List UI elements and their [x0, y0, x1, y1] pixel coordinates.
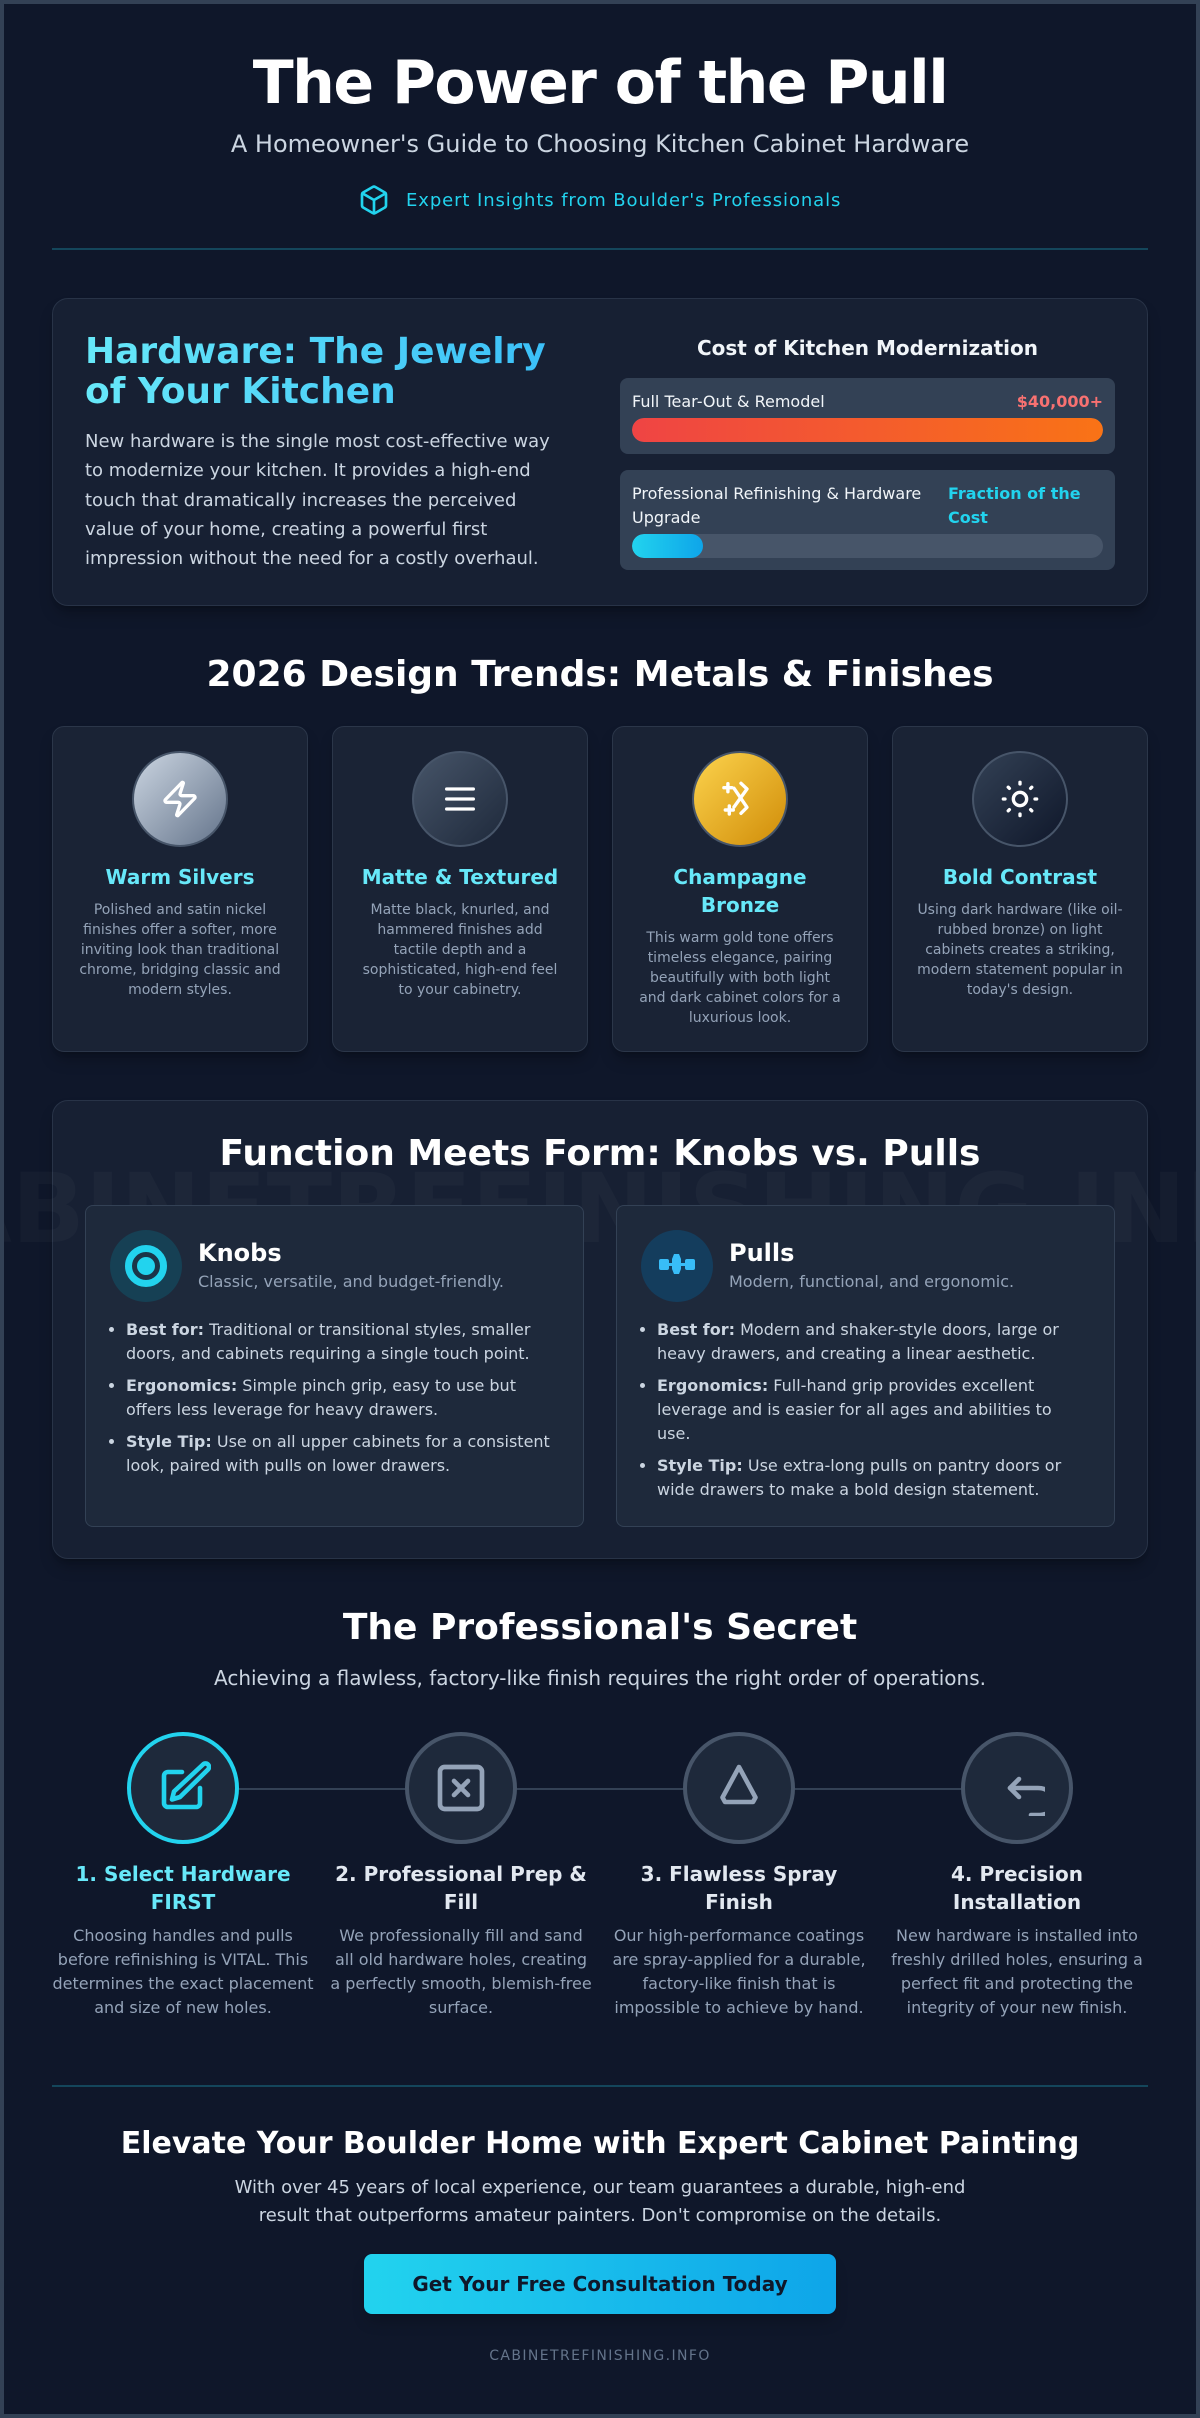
card: matte and textured: [332, 726, 588, 1052]
tagline with box icon: [360, 185, 841, 215]
button: [364, 2254, 836, 2314]
header: [231, 48, 969, 215]
card: champagne bronze: This warm gold tone offers timeless elegance, pairing beautifully with both light and dark cabinet colors for a luxurious look.: [639, 930, 841, 1026]
step 2: 2. Professional Prep & Fill: [335, 1862, 587, 1914]
bar chart: refinishing: Fraction of the: [948, 484, 1081, 503]
step 3: 3. Flawless Spray Finish: [641, 1862, 837, 1914]
panel: pulls: [616, 1205, 1115, 1527]
button: Get Your Free Consultation Today: [412, 2272, 788, 2296]
card: matte and textured: Matte & Textured: [362, 865, 558, 889]
card: champagne bronze: Champagne Bronze: [673, 865, 807, 917]
card: warm silvers: [52, 726, 308, 1052]
icon: spray: [683, 1732, 795, 1844]
chart heading: Cost of Kitchen Modernization: [697, 336, 1038, 360]
pull details: [640, 1320, 1062, 1499]
title: The Power of the Pull: [253, 48, 947, 118]
step 4: New hardware is installed into freshly drilled holes, ensuring a perfect fit and protecting the integrity of your new finish.: [891, 1926, 1143, 2017]
panel: knobs vs pulls background: [52, 1100, 1148, 1559]
icon: select hardware: [127, 1732, 239, 1844]
icon: sparkle: [692, 751, 788, 847]
step 3: Our high-performance coatings are spray-applied for a durable, factory-like finish that is impossible to achieve by hand.: [612, 1926, 866, 2017]
bar chart: refinishing: Upgrade: [632, 508, 700, 527]
step 3: [612, 1732, 866, 2017]
subtitle: A Homeowner's Guide to Choosing Kitchen Cabinet Hardware: [231, 130, 969, 158]
step 1: [52, 1732, 314, 2017]
panel: knobs: [85, 1205, 584, 1527]
intro paragraph: New hardware is the single most cost-effective way to modernize your kitchen. It provides a high-end touch that dramatically increases the perceived value of your home, creating a powerful first impression without the need for a costly overhaul.: [85, 431, 550, 569]
knob details: Ergonomics: Simple pinch grip, easy to use but offers less leverage for heavy drawers.: [126, 1376, 516, 1419]
step 1: Choosing handles and pulls before refinishing is VITAL. This determines the exact placement and size of new holes.: [52, 1926, 314, 2017]
heading: design trends: 2026 Design Trends: Metals & Finishes: [206, 654, 994, 695]
call to action paragraph: With over 45 years of local experience, our team guarantees a durable, high-end result that outperforms amateur painters. Don't compromise on the details.: [235, 2177, 965, 2226]
step 2: We professionally fill and sand all old hardware holes, creating a perfectly smooth, blemish-free surface.: [330, 1926, 592, 2017]
pull details: Best for: Modern and shaker-style doors, large or heavy drawers, and creating a linear aesthetic.: [657, 1320, 1059, 1363]
icon: box: [360, 185, 388, 215]
pull details: Style Tip: Use extra-long pulls on pantry doors or wide drawers to make a bold design statement.: [657, 1456, 1061, 1499]
icon: zap: [132, 751, 228, 847]
bar chart: full remodel: [620, 378, 1115, 454]
panel: pulls: Pulls: [729, 1239, 794, 1267]
card: matte and textured: Matte black, knurled, and hammered finishes add tactile depth and a sophisticated, high-end feel to your cabinetry.: [363, 902, 557, 998]
footer url: CABINETREFINISHING.INFO: [489, 2348, 711, 2364]
icon: sun: [972, 751, 1068, 847]
card: warm silvers: Polished and satin nickel finishes offer a softer, more inviting look than traditional chrome, bridging classic and modern styles.: [79, 902, 281, 998]
bar chart: full remodel: Full Tear-Out & Remodel: [632, 392, 825, 411]
panel: hardware intro: [52, 298, 1148, 606]
icon: fill: [405, 1732, 517, 1844]
tagline text: Expert Insights from Boulder's Professionals: [406, 190, 841, 211]
icon: knob: [110, 1230, 182, 1302]
heading: call to action: Elevate Your Boulder Home with Expert Cabinet Painting: [121, 2126, 1079, 2161]
icon: menu: [412, 751, 508, 847]
bar chart: refinishing: [620, 470, 1115, 570]
bar chart: refinishing: Professional Refinishing & Hardware: [632, 484, 921, 503]
knob details: [109, 1320, 550, 1475]
subheading: Achieving a flawless, factory-like finish requires the right order of operations.: [214, 1666, 986, 1690]
heading: jewelry: Hardware: The Jewelry of Your Kitchen: [85, 331, 546, 412]
bar chart: full remodel: $40,000+: [1017, 392, 1103, 411]
heading: professional secret: The Professional's Secret: [343, 1607, 857, 1648]
knob details: Style Tip: Use on all upper cabinets for a consistent look, paired with pulls on lower drawers.: [126, 1432, 550, 1475]
icon: installation: [961, 1732, 1073, 1844]
icon: pull: [641, 1230, 713, 1302]
step 4: [891, 1732, 1143, 2017]
heading: knobs vs pulls: Function Meets Form: Knobs vs. Pulls: [220, 1133, 980, 1174]
pull details: Ergonomics: Full-hand grip provides excellent leverage and is easier for all ages and abilities to use.: [657, 1376, 1052, 1443]
card: bold contrast: Bold Contrast: [943, 865, 1097, 889]
card: bold contrast: [892, 726, 1148, 1052]
panel: knobs: Classic, versatile, and budget-friendly.: [198, 1272, 504, 1291]
panel: pulls: Modern, functional, and ergonomic.: [729, 1272, 1014, 1291]
knob details: Best for: Traditional or transitional styles, smaller doors, and cabinets requiring a single touch point.: [126, 1320, 530, 1363]
card: warm silvers: Warm Silvers: [106, 865, 254, 889]
card: champagne bronze: [612, 726, 868, 1052]
panel: knobs: Knobs: [198, 1239, 282, 1267]
bar chart: refinishing: Cost: [948, 508, 988, 527]
step 2: [330, 1732, 592, 2017]
step 4: 4. Precision Installation: [951, 1862, 1083, 1914]
card: bold contrast: Using dark hardware (like oil-rubbed bronze) on light cabinets creates a striking, modern statement popular in today's design.: [917, 902, 1123, 998]
step 1: 1. Select Hardware FIRST: [75, 1862, 291, 1914]
